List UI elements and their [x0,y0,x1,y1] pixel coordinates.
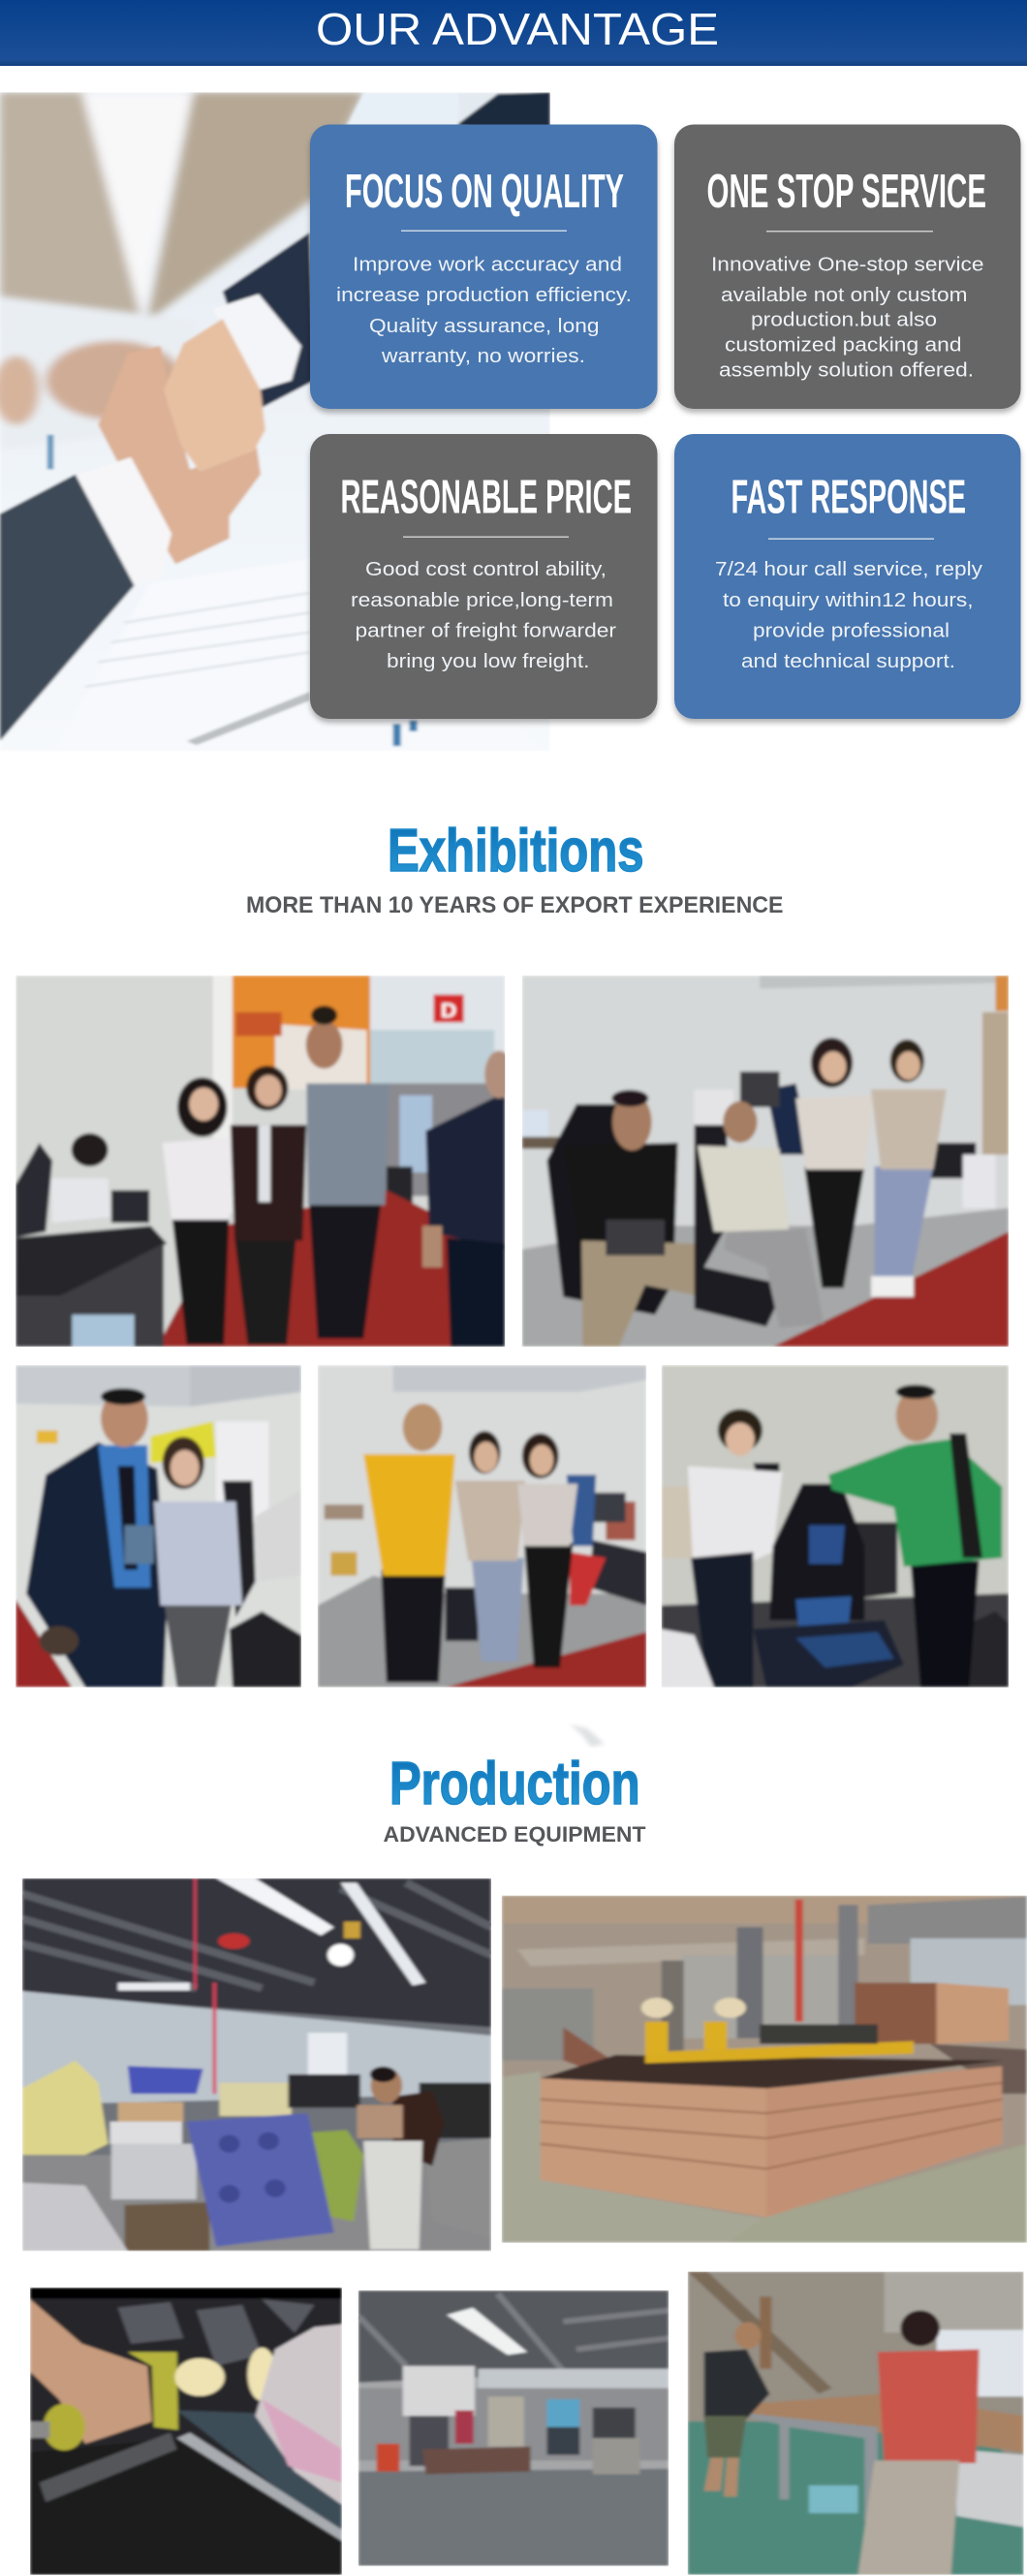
subheading: advanced equipment: ADVANCED EQUIPMENT [384,1822,646,1847]
text block: fast response: provide professional [753,620,949,641]
photo: seated visitors with chairs [521,975,1009,1347]
text block: one stop service: Innovative One-stop service [711,254,984,275]
photo: business handshake [0,92,550,751]
text block: one stop service [711,254,984,382]
text block: reasonable price: Good cost control ability, [365,559,607,580]
panel: fast response [674,434,1021,719]
photo: three people with thumbs up [318,1365,647,1688]
photo: factory floor with presses and forklift [358,2290,669,2566]
photo: upholstery workshop [22,1878,491,2251]
text block: focus on quality: Quality assurance, long [369,316,599,337]
decorative smudge: grey mark [570,1724,605,1747]
text block: one stop service: assembly solution offered. [719,360,974,382]
photo: two people with blue gaming chair [661,1365,1009,1688]
text block: reasonable price: partner of freight forwarder [355,620,616,641]
photo: exhibition booth with three visitors [16,975,506,1347]
text block: fast response [715,559,982,672]
heading: focus on quality: FOCUS ON QUALITY [345,166,624,218]
text block: one stop service: production.but also [751,310,937,331]
text block: reasonable price: reasonable price,long-term [351,590,613,611]
photo: exhibition booth with three visitors: D [441,999,456,1022]
text block: one stop service: customized packing and [725,335,961,357]
photo group: exhibitions [16,976,1009,1688]
text block: fast response: to enquiry within12 hours, [723,590,974,611]
subheading: export experience: MORE THAN 10 YEARS OF EXPORT EXPERIENCE [246,892,783,918]
title: OUR ADVANTAGE [316,4,719,54]
panel: reasonable price [310,434,657,719]
text block: one stop service: available not only custom [721,285,967,306]
header band [0,0,1027,66]
photo: wood panel stack with vacuum lifter [502,1895,1027,2243]
heading: exhibitions: Exhibitions [388,818,643,885]
text block: focus on quality: warranty, no worries. [381,346,585,367]
text block: focus on quality [336,254,632,367]
text block: focus on quality: Improve work accuracy and [353,254,622,275]
text block: reasonable price: bring you low freight. [387,651,589,672]
text block: fast response: and technical support. [741,651,955,672]
photo: two workers at cutting table [688,2271,1024,2575]
photo: air stapler on black panel [30,2287,342,2575]
photo: man in suit with woman [16,1365,301,1688]
panel: focus on quality [310,124,657,409]
text block: reasonable price [351,559,616,672]
heading: production: Production [389,1751,639,1817]
text block: fast response: 7/24 hour call service, reply [715,559,982,580]
photo group: production [22,1878,1027,2575]
text block: focus on quality: increase production efficiency. [336,285,632,306]
heading: reasonable price: REASONABLE PRICE [341,471,632,523]
panel: one stop service [674,124,1021,409]
